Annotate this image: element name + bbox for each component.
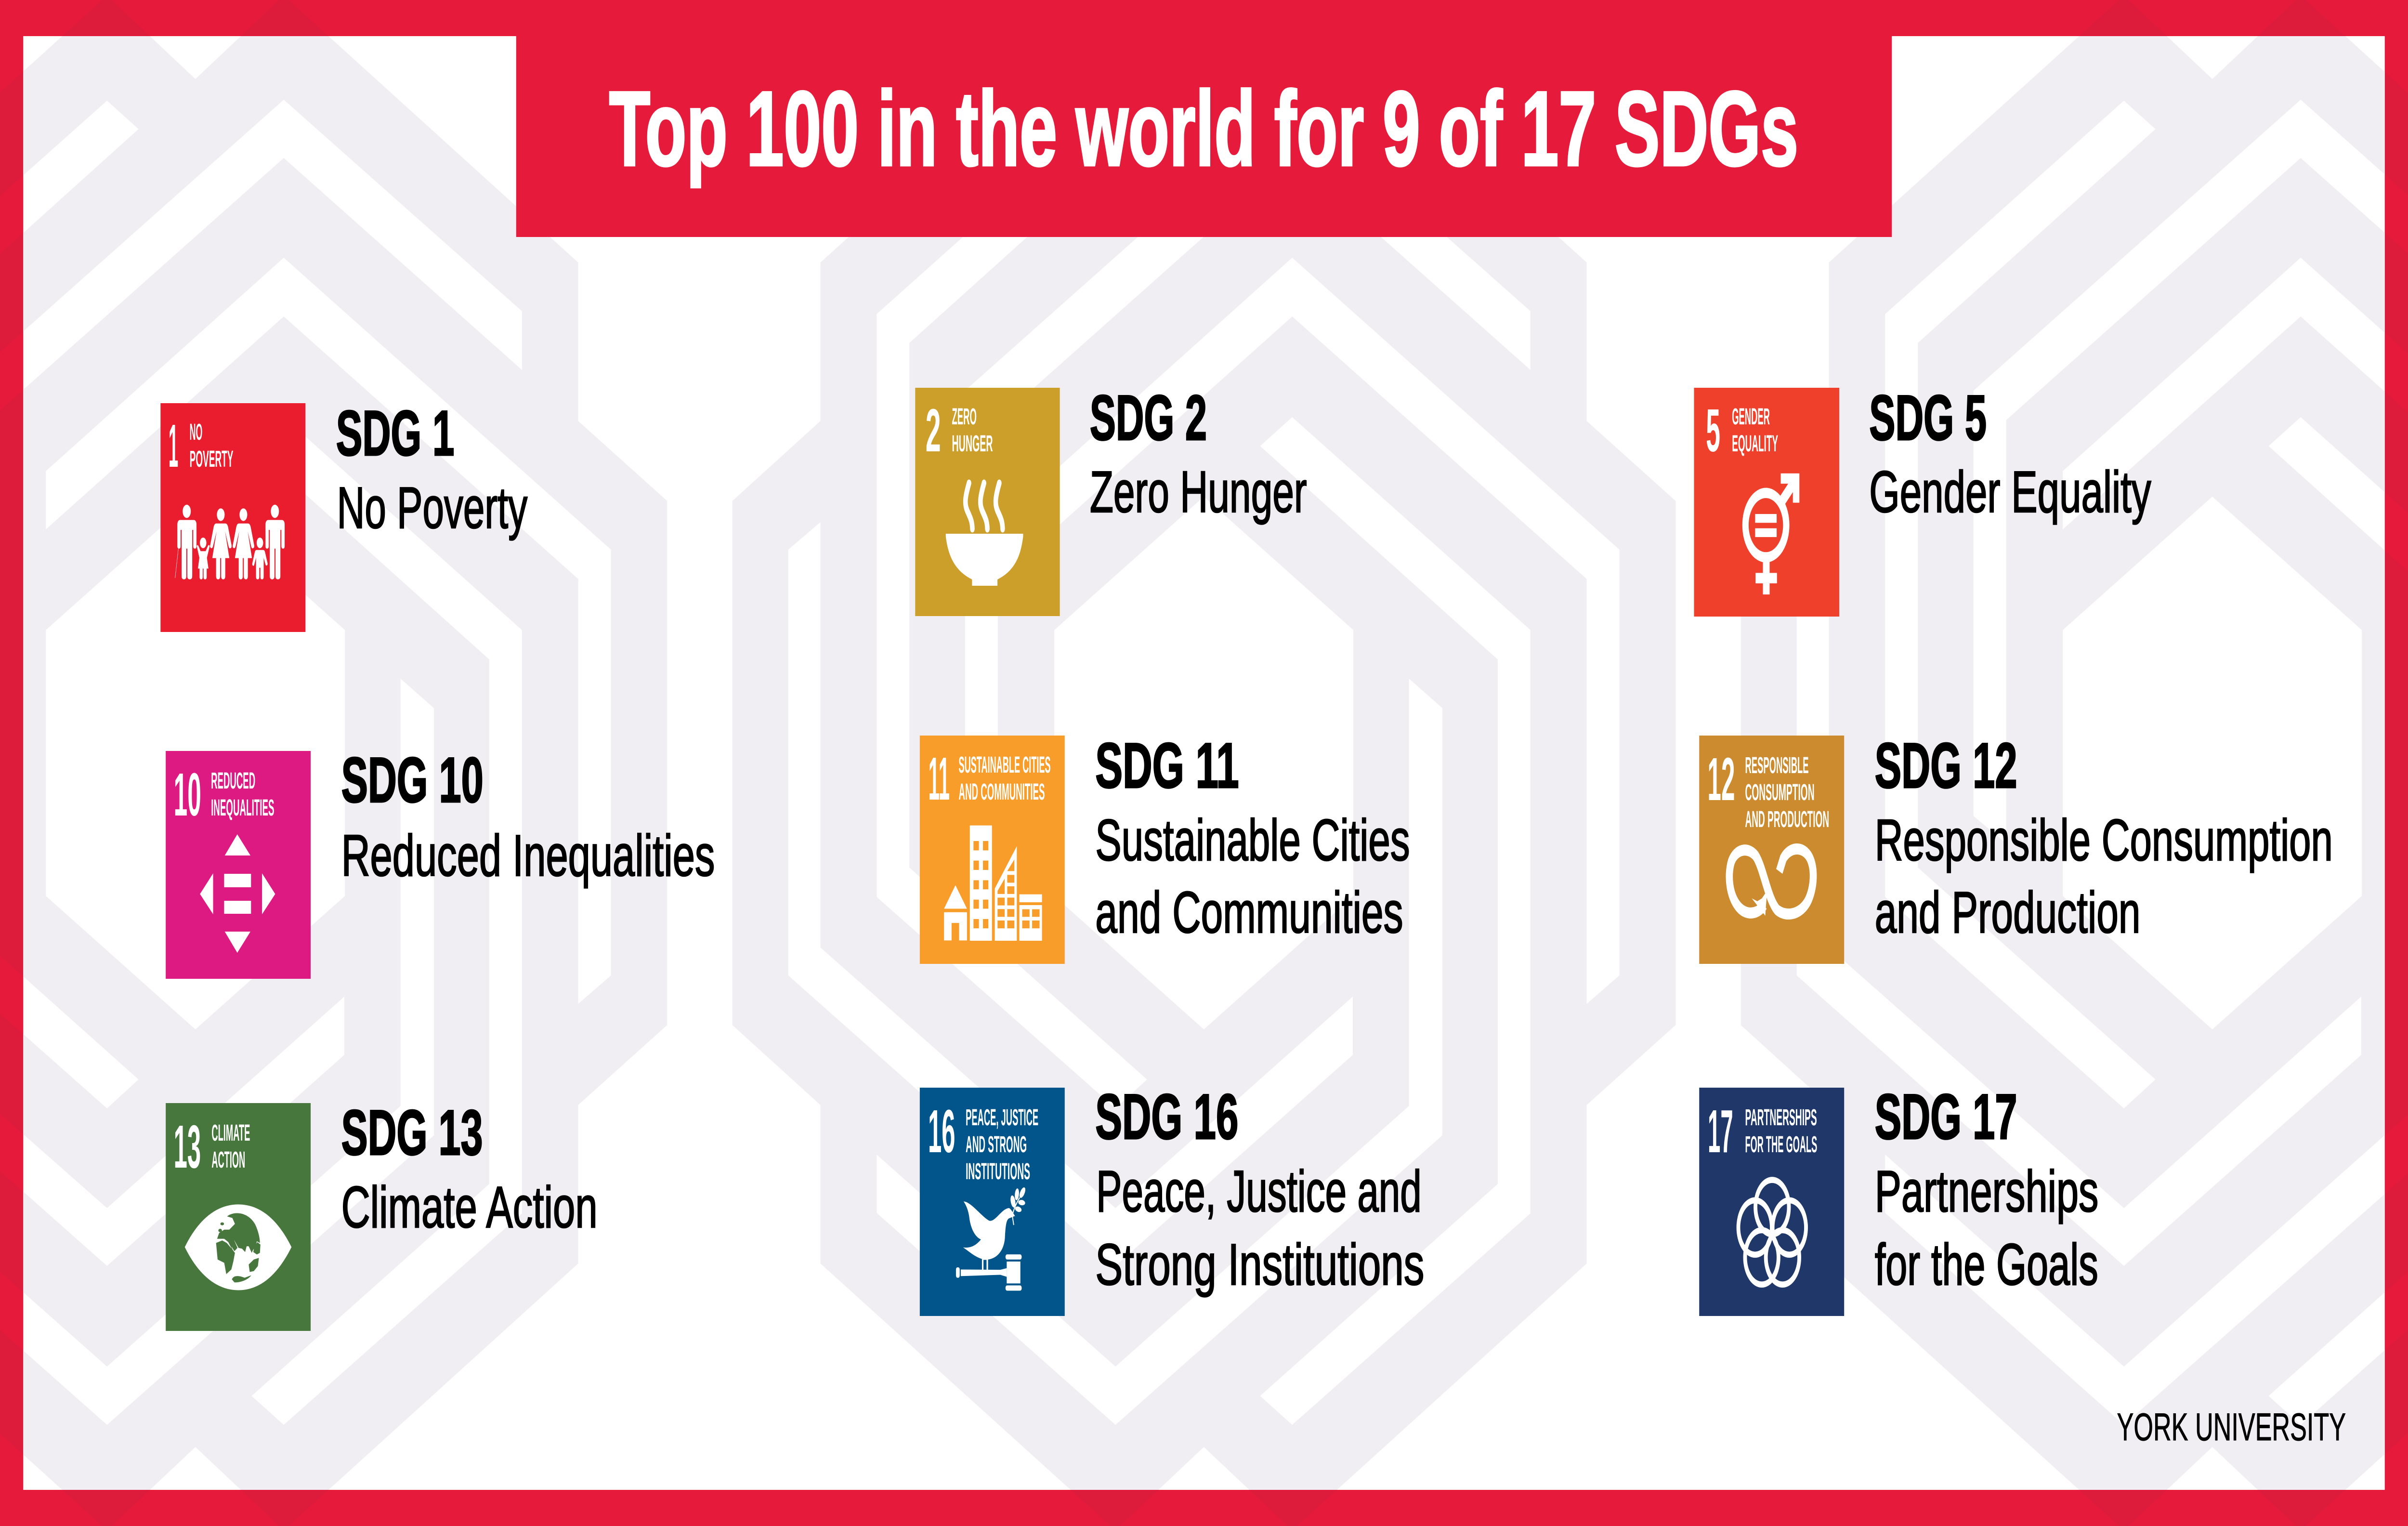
heading: SDG 16: SDG 16 [1095,1080,1238,1153]
SDG 17 tile: PARTNERSHIPS [1745,1105,1817,1131]
SDG 11 tile [920,736,1065,964]
heading: SDG 13: SDG 13 [341,1096,483,1169]
SDG 1 tile [160,403,305,632]
SDG 12 tile: CONSUMPTION [1745,779,1815,805]
SDG 16 tile: AND STRONG [966,1131,1027,1158]
description: Zero Hunger: Zero Hunger [1090,459,1307,525]
description: Responsible Consumption and Production: Responsible Consumption [1875,807,2333,873]
SDG 5 tile [1694,388,1839,617]
SDG 10 tile: 10 [174,761,201,829]
description: Sustainable Cities and Communities [1095,807,1410,945]
panel: SDG 11 [920,729,1410,964]
heading: SDG 12: SDG 12 [1875,729,2017,802]
icon: steaming bowl [946,483,1023,586]
description: Gender Equality: Gender Equality [1869,459,2151,525]
description: Sustainable Cities and Communities: Sustainable Cities [1095,807,1410,873]
SDG 12 tile: RESPONSIBLE [1745,752,1809,778]
SDG 13 tile: CLIMATE [211,1120,250,1146]
icon: reduced inequalities arrows [200,834,275,953]
SDG 2 tile: 2 [926,397,941,464]
SDG 11 tile: AND COMMUNITIES [958,779,1045,805]
description: Peace, Justice and Strong Institutions [1095,1158,1424,1297]
description: Partnerships for the Goals: Partnerships [1875,1158,2098,1224]
icon: infinity loop [1729,849,1813,916]
source label: York University: YORK UNIVERSITY [2117,1406,2346,1449]
icon: gender equality symbol [1745,474,1799,594]
title banner [516,0,1892,237]
SDG 16 tile [920,1088,1065,1316]
description: Responsible Consumption and Production: and Production [1875,879,2140,945]
SDG 1 tile: NO [190,419,202,445]
SDG 10 tile: REDUCED [211,768,255,794]
SDG 17 tile: 17 [1708,1098,1733,1165]
panel: SDG 2 [915,382,1307,616]
description: Reduced Inequalities: Reduced Inequalities [341,822,715,888]
SDG 10 tile [166,751,311,979]
heading: SDG 11: SDG 11 [1095,729,1239,802]
heading: SDG 17: SDG 17 [1875,1080,2017,1153]
heading: SDG 1: SDG 1 [336,397,454,469]
SDG 16 tile: INSTITUTIONS [966,1158,1030,1184]
panel: SDG 10 [166,744,715,979]
SDG 1 tile: 1 [169,412,178,480]
panel: SDG 17 [1699,1080,2098,1316]
SDG 2 tile: ZERO [952,404,977,430]
SDG 11 tile: 11 [929,745,950,813]
SDG 12 tile [1699,736,1844,964]
SDG 5 tile: 5 [1706,397,1720,464]
panel: SDG 16 [920,1080,1424,1316]
heading: SDG 10: SDG 10 [341,744,484,816]
SDG 11 tile: SUSTAINABLE CITIES [958,752,1051,778]
icon: city buildings [944,826,1042,941]
SDG 13 tile: ACTION [211,1147,245,1173]
title: Top 100 in the world for 9 of 17 SDGs [609,70,1798,188]
description: Partnerships for the Goals [1875,1158,2098,1297]
description: Peace, Justice and Strong Institutions: Peace, Justice and [1096,1158,1422,1224]
SDG 10 tile: INEQUALITIES [211,795,275,821]
SDG 1 tile: POVERTY [190,446,234,472]
panel: SDG 1 [160,397,527,632]
description: Partnerships for the Goals: for the Goals [1875,1231,2098,1297]
description: Peace, Justice and Strong Institutions: Strong Institutions [1095,1231,1424,1297]
icon: eye with globe [185,1204,291,1290]
icon: family [175,505,285,579]
description: Sustainable Cities and Communities: and Communities [1095,879,1403,945]
SDG 2 tile: HUNGER [952,431,993,457]
icon: five interlocking rings [1739,1180,1806,1285]
SDG 17 tile [1699,1088,1844,1316]
SDG 17 tile: FOR THE GOALS [1745,1131,1817,1158]
SDG 5 tile: EQUALITY [1732,431,1778,457]
SDG 16 tile: PEACE, JUSTICE [966,1105,1038,1131]
SDG 16 tile: 16 [928,1098,955,1165]
SDG 2 tile [915,388,1060,616]
panel: SDG 13 [166,1096,598,1331]
SDG 12 tile: AND PRODUCTION [1745,806,1829,832]
heading: SDG 5: SDG 5 [1869,382,1987,454]
SDG 13 tile [166,1103,311,1331]
SDG 13 tile: 13 [174,1113,201,1181]
description: Climate Action: Climate Action [341,1174,598,1240]
description: No Poverty: No Poverty [337,474,527,540]
SDG 5 tile: GENDER [1732,404,1770,430]
panel: SDG 12 [1699,729,2333,964]
SDG 12 tile: 12 [1707,746,1735,813]
icon: dove and gavel [956,1186,1026,1291]
heading: SDG 2: SDG 2 [1090,382,1207,454]
panel: SDG 5 [1694,382,2151,617]
description: Responsible Consumption and Production [1875,807,2333,945]
